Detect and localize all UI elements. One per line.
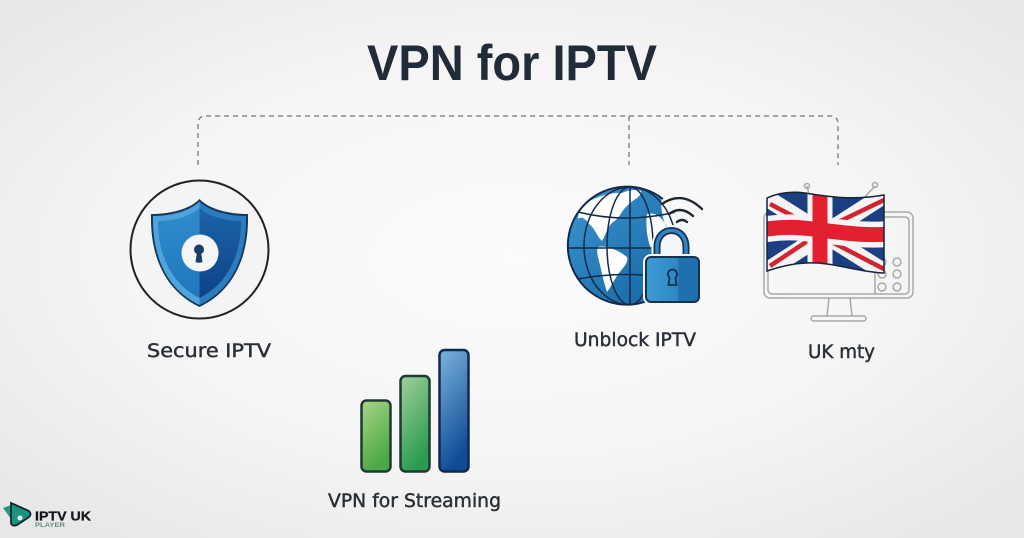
title: VPN for IPTV — [367, 35, 658, 91]
UK flag — [766, 192, 885, 274]
icon: globe with lock and wifi — [567, 187, 702, 305]
television outline — [764, 182, 913, 321]
icon: shield in circle — [130, 180, 268, 318]
wifi waves — [662, 198, 702, 222]
label: VPN for Streaming: VPN for Streaming — [328, 490, 501, 512]
label: Secure IPTV: Secure IPTV — [147, 340, 271, 362]
chart: signal bars — [362, 350, 468, 472]
logo: IPTV UK Player — [3, 503, 92, 529]
logo: IPTV UK Player: PLAYER — [35, 523, 66, 529]
globe — [567, 187, 690, 305]
logo mark — [3, 503, 30, 526]
label: UK mty: UK mty — [808, 341, 875, 363]
logo: IPTV UK Player: IPTV UK — [35, 508, 92, 524]
padlock — [646, 230, 699, 302]
dashed connector lines — [198, 116, 838, 165]
icon: TV with UK flag — [760, 182, 913, 321]
label: Unblock IPTV: Unblock IPTV — [574, 329, 696, 351]
